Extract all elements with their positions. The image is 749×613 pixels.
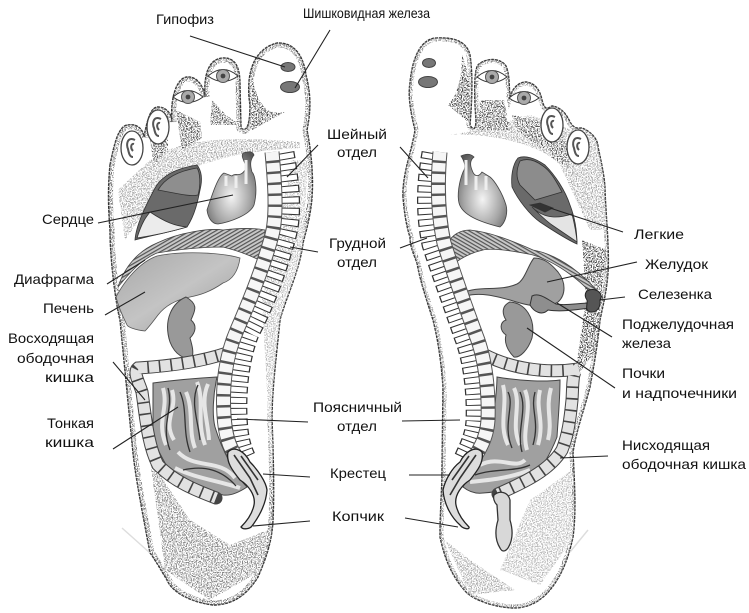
labels: top and centre: Грудной xyxy=(329,235,386,251)
panel: left foot xyxy=(108,43,312,605)
left heart xyxy=(207,152,256,224)
labels: right side: железа xyxy=(622,335,671,351)
gray stroke lower left xyxy=(122,528,150,553)
left lung xyxy=(135,165,201,240)
right foot stipple shading xyxy=(403,38,610,608)
labels: top and centre: Шейный xyxy=(327,126,387,142)
right pancreas xyxy=(530,295,590,313)
icon: left eyes xyxy=(173,70,238,104)
labels: left side: Диафрагма xyxy=(14,271,94,287)
gray stroke lower right xyxy=(570,530,588,552)
leader lines xyxy=(98,30,637,527)
left diaphragm xyxy=(118,228,265,287)
left liver xyxy=(116,253,240,331)
right stomach xyxy=(463,258,564,306)
labels: left side: Сердце xyxy=(42,211,94,227)
icon: right ears xyxy=(541,108,589,164)
icon: left ears xyxy=(121,110,169,165)
left foot stipple shading xyxy=(108,43,312,605)
labels: left side xyxy=(8,211,94,450)
labels: top and centre: Гипофиз xyxy=(156,11,214,27)
left sacrum and coccyx xyxy=(228,449,267,529)
right small intestine xyxy=(463,377,560,493)
labels: left side: кишка xyxy=(45,434,94,450)
labels: right side: Селезенка xyxy=(638,286,712,302)
right sacrum and coccyx xyxy=(443,449,482,529)
labels: left side: Печень xyxy=(43,300,94,316)
labels: right side: Желудок xyxy=(645,256,709,272)
left small intestine xyxy=(153,377,247,495)
labels: top and centre: отдел xyxy=(337,144,377,160)
right kidney xyxy=(501,302,533,357)
labels: right side: ободочная кишка xyxy=(622,456,746,472)
left colon xyxy=(136,353,227,498)
labels: left side: ободочная xyxy=(17,350,94,366)
labels: right side: Поджелудочная xyxy=(622,316,734,332)
labels: left side: Тонкая xyxy=(47,415,94,431)
labels: right side: Легкие xyxy=(634,226,684,242)
labels: right side: Нисходящая xyxy=(622,437,710,453)
labels: left side: Восходящая xyxy=(8,330,94,346)
labels: left side: кишка xyxy=(45,369,94,385)
labels: top and centre: Крестец xyxy=(330,465,386,481)
labels: top and centre: отдел xyxy=(337,418,377,434)
right heart xyxy=(458,154,507,227)
right diaphragm xyxy=(448,230,603,300)
icon: right eyes xyxy=(477,70,539,104)
right spine xyxy=(428,152,488,459)
left foot sole outline xyxy=(108,43,312,605)
left kidney xyxy=(168,297,195,358)
labels: top and centre: Копчик xyxy=(332,508,385,524)
right sigmoid end xyxy=(494,492,512,551)
left big toe dots xyxy=(280,62,300,92)
right colon xyxy=(485,355,578,494)
labels: right side xyxy=(622,226,746,472)
labels: top and centre: Поясничный xyxy=(313,399,402,415)
right big toe dots xyxy=(418,58,438,88)
labels: top and centre xyxy=(156,5,430,524)
right lung xyxy=(512,157,577,244)
labels: right side: Почки xyxy=(622,365,665,381)
labels: right side: и надпочечники xyxy=(622,385,737,401)
left spine xyxy=(224,152,289,459)
labels: top and centre: отдел xyxy=(337,254,377,270)
labels: top and centre: Шишковидная железа xyxy=(303,5,430,21)
panel: right foot xyxy=(403,38,610,608)
right spleen xyxy=(585,290,601,312)
right foot sole outline xyxy=(403,38,608,608)
